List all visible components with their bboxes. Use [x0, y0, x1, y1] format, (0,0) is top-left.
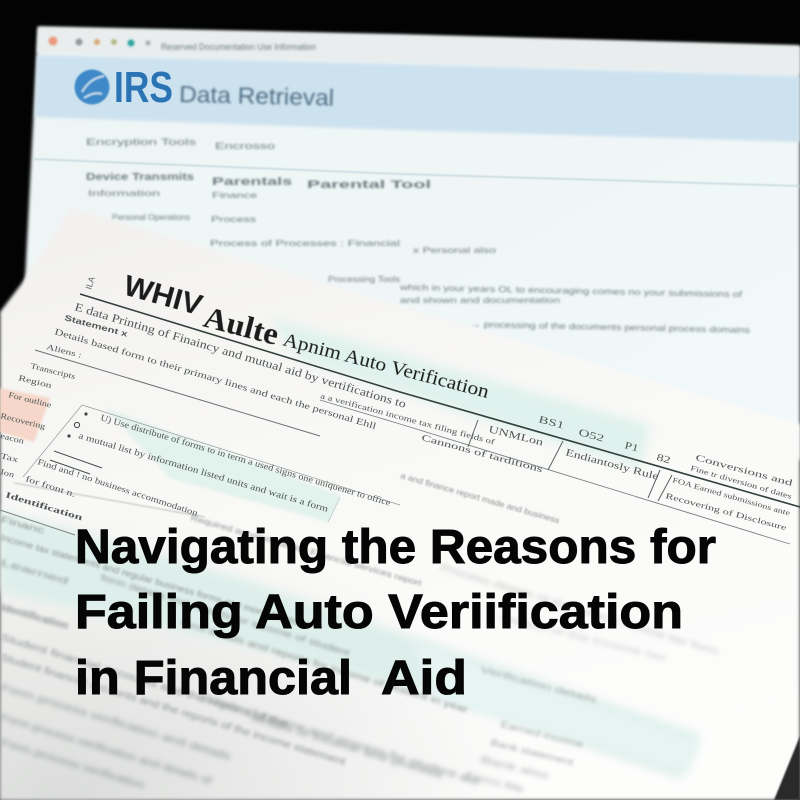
screen body text: Finance [212, 190, 257, 200]
form blurred text: Income tax statements and regular business forms and more details of [0, 532, 310, 630]
form sharp text: a a verification income tax filing fields of [319, 391, 496, 447]
form blurred text: Verification details [479, 664, 599, 705]
form sharp text: Endiantosly Rule [564, 447, 661, 483]
form sharp text: eacon [0, 431, 25, 446]
form blurred text: Financ [0, 514, 46, 536]
form blurred text: Bank also [480, 754, 550, 781]
IRS logo [74, 63, 173, 112]
form sharp text [0, 301, 794, 532]
form sharp text: Conversions and [694, 452, 794, 488]
form title: Aulte [200, 299, 283, 352]
title [75, 521, 716, 705]
screen body text: Encryption Tools [86, 137, 196, 148]
form blurred text: Form process verification and details [0, 682, 232, 763]
form blurred text: details of income and process [249, 712, 444, 781]
form sharp text: for front n. [24, 473, 77, 499]
form sharp text: P1 [623, 440, 640, 455]
teal highlight: details box [105, 408, 340, 522]
title: Failing Auto Veriification [75, 586, 683, 639]
form blurred text: Details of the income tax [500, 612, 668, 663]
form blurred text: Form process verification [0, 737, 146, 792]
screen body text: Process [211, 214, 256, 224]
form sharp text: BS1 [537, 414, 565, 432]
form sharp text: U) Use distribute of forms to in term a used signs one uniquener to office [99, 412, 392, 508]
form blurred text [0, 470, 720, 794]
screen body text: → processing of the documents personal process domains [470, 319, 750, 335]
screen body text: Encrosso [215, 141, 275, 152]
screen body text: x Personal also [413, 245, 496, 255]
browser toolbar [48, 36, 316, 52]
form sharp text: For outline [8, 390, 53, 410]
screen body text: Information [88, 188, 160, 198]
form blurred text: Required accommodation Financial services report [189, 512, 424, 588]
title: Navigating the Reasons for [75, 521, 716, 574]
form blurred text: a and finance report made and business [399, 470, 561, 525]
form sharp text: Transcripts [30, 361, 76, 381]
form sharp text: Recovering of Disclosure [664, 491, 788, 532]
form rules [0, 294, 800, 544]
screen body text: and shown and documentation [400, 295, 560, 305]
screen body text: Parentals [212, 176, 292, 188]
form title [83, 270, 492, 403]
panel: printed form sheet [0, 207, 800, 800]
form sharp text: Aliens : [46, 342, 83, 360]
teal highlight: lower band [0, 510, 700, 778]
form blurred text: Form process verification and details of [0, 712, 213, 787]
form sharp text: Region [18, 373, 53, 390]
IRS logo: IRS [114, 63, 173, 112]
form sharp text: Find and ! no business accommodation [36, 456, 200, 518]
form blurred text: Process details of the current income tax form [439, 562, 720, 657]
form blurred text: Form file [465, 770, 525, 794]
salmon highlight [0, 388, 50, 442]
teal highlight: lower box [410, 640, 700, 775]
form blurred text: Student financial accounts and the reports of the [0, 632, 290, 731]
panel: laptop screen [20, 27, 800, 460]
teal highlight: form header [270, 318, 650, 468]
form title: Apnim Auto Verification [281, 330, 492, 403]
screen body text: which in your years OL to encouraging comes no your submissions of [399, 282, 743, 299]
screen body text: Processing Tools [328, 274, 400, 284]
form sharp text: 82 [655, 452, 672, 467]
browser toolbar: Reserved Documentation Use Information [161, 42, 316, 52]
form blurred text: form details and reports for income of student [99, 572, 352, 658]
form sharp text: Cannons of tarditions [420, 432, 545, 474]
form sharp text: E data Printing of Finaincy and mutual aid by vertifications to [73, 301, 408, 411]
screen body text [86, 137, 750, 335]
form blurred text: Student financial accounts and the reports of the income statement [0, 652, 347, 768]
form blurred text: Learned [0, 557, 69, 586]
screen body text: Process of Processes : Financial [210, 238, 400, 248]
form sharp text: UNMLon [487, 424, 544, 448]
form sharp text: Fine tr diversion of dates [689, 463, 793, 501]
form bullets [67, 412, 88, 438]
form blurred text: Bank statement [490, 737, 575, 768]
form sharp text: Recovering [0, 411, 46, 431]
form blurred text: Earned income [500, 719, 584, 750]
screen body text: Parental Tool [307, 179, 431, 191]
form blurred text: details of income and process for student aid [199, 692, 480, 788]
form sharp text: Identification [4, 489, 84, 522]
form sharp text: a mutual list by information listed units and wait is a form [77, 430, 330, 514]
form title: WHIV [120, 270, 206, 322]
laptop keyboard corner [774, 736, 800, 800]
form blurred text: Identification [0, 602, 69, 632]
title: in Financial [75, 652, 352, 705]
title: Aid [381, 652, 467, 705]
screen body text: Personal Operations [112, 212, 190, 222]
screen heading: Data Retrieval [179, 81, 334, 111]
form sharp text: Details based form to their primary lines and each the personal Ehll [53, 326, 378, 431]
form sharp text: O52 [577, 427, 605, 445]
screen body text: Device Transmits [86, 171, 194, 183]
form sharp text: FOA Earned submissions ante [671, 475, 792, 518]
form title: ILA [83, 275, 97, 291]
form sharp text: Statement x [63, 313, 129, 339]
form blurred text: form details and reports for income of student in year [179, 617, 469, 715]
